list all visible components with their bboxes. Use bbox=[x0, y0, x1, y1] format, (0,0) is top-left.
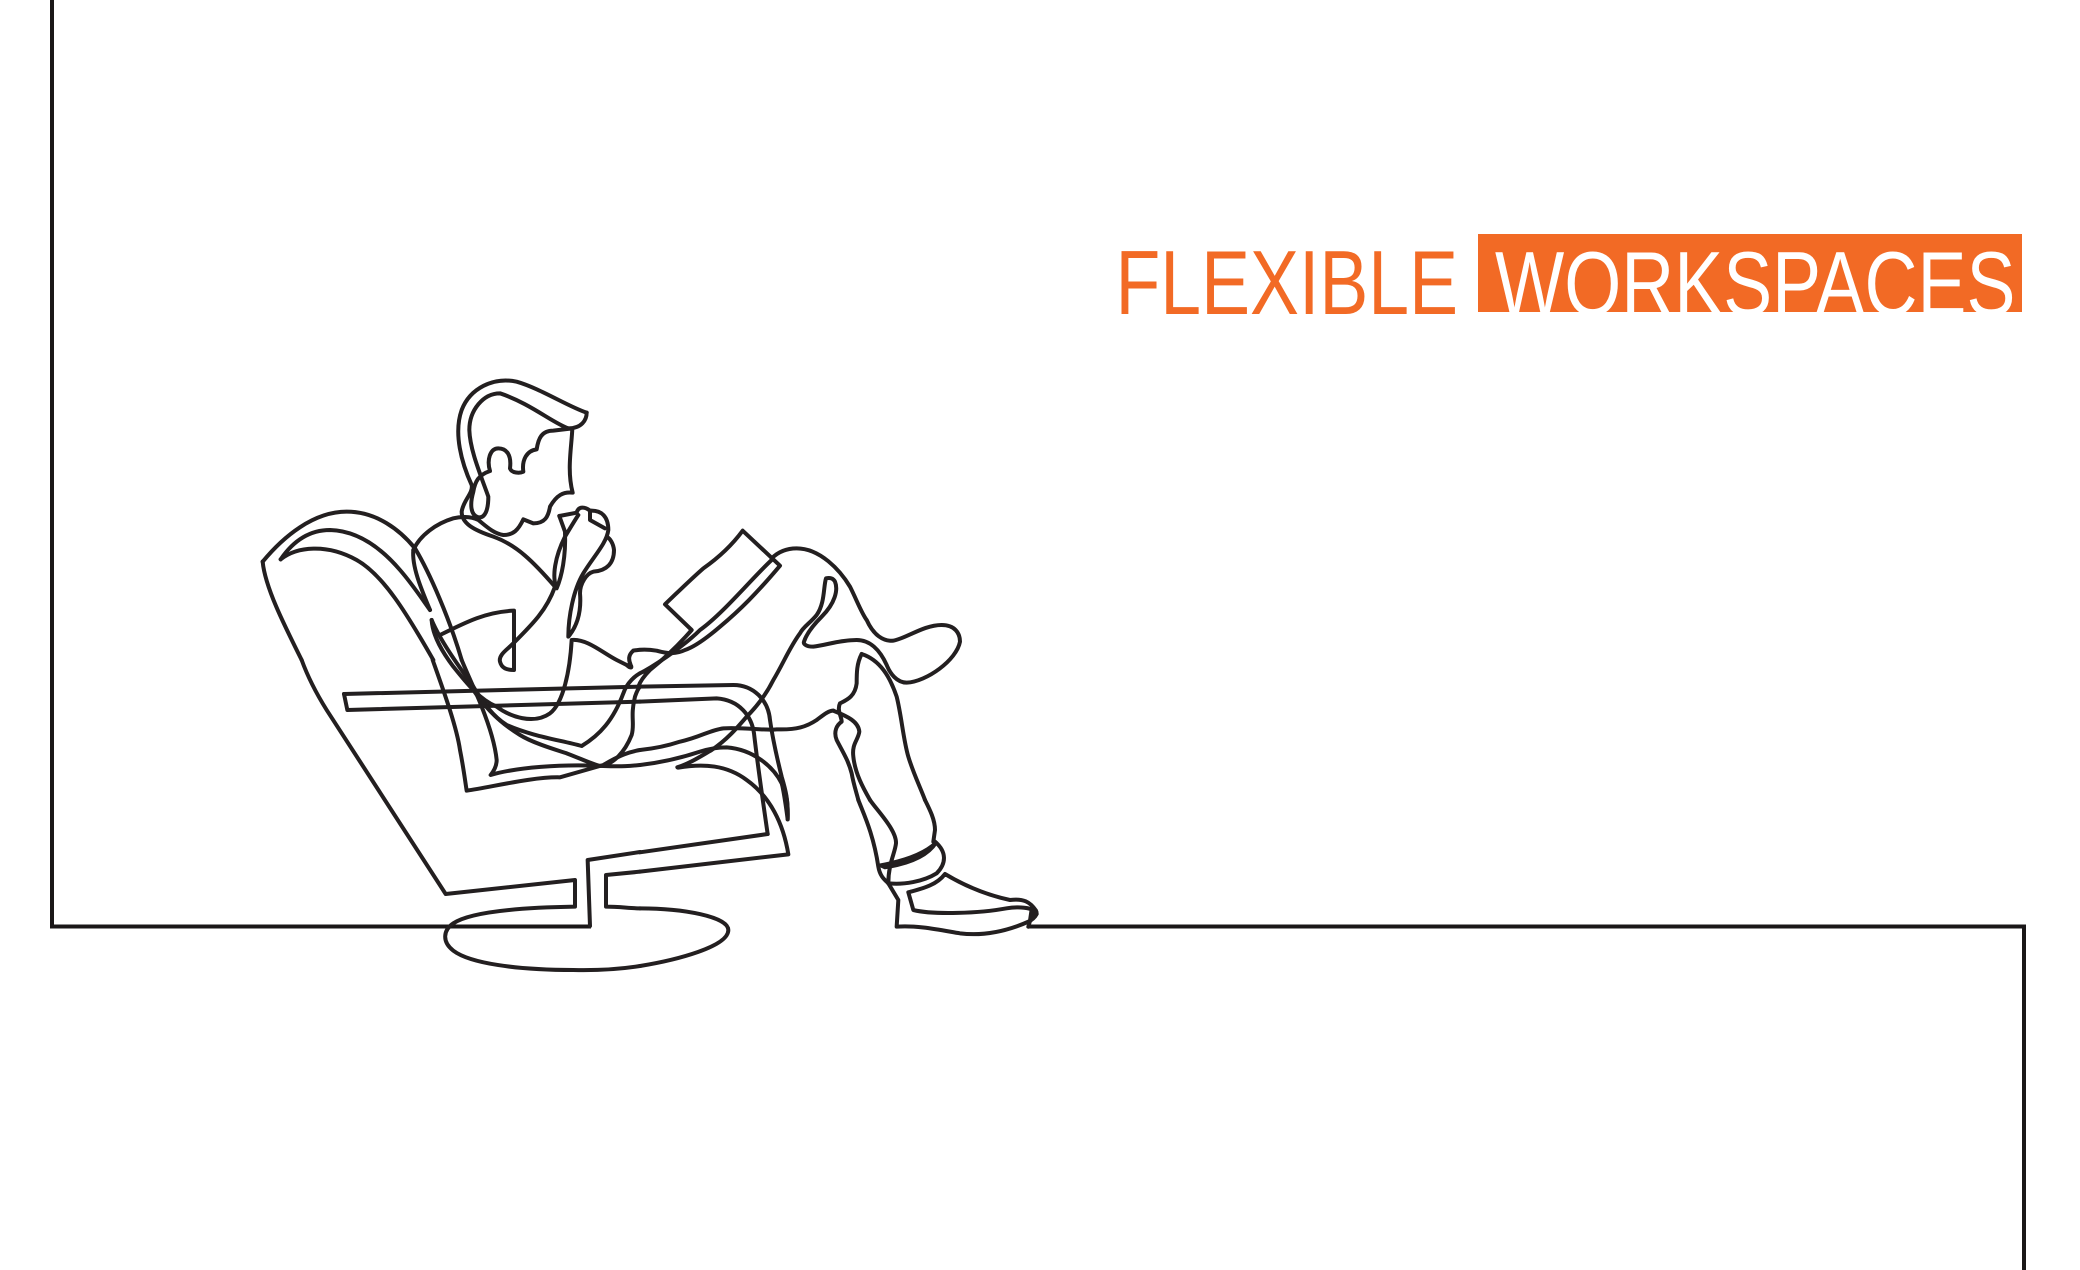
title: FLEXIBLE: FLEXIBLE bbox=[1116, 233, 1458, 334]
man reading: head, hair and face bbox=[413, 381, 587, 587]
man reading: crossed legs bbox=[677, 548, 960, 884]
armchair bbox=[263, 512, 833, 970]
man reading: torso, raised arm and hand bbox=[432, 508, 643, 766]
trouser cuff bbox=[881, 843, 936, 867]
shoes bbox=[888, 874, 1037, 934]
open book bbox=[633, 531, 780, 687]
